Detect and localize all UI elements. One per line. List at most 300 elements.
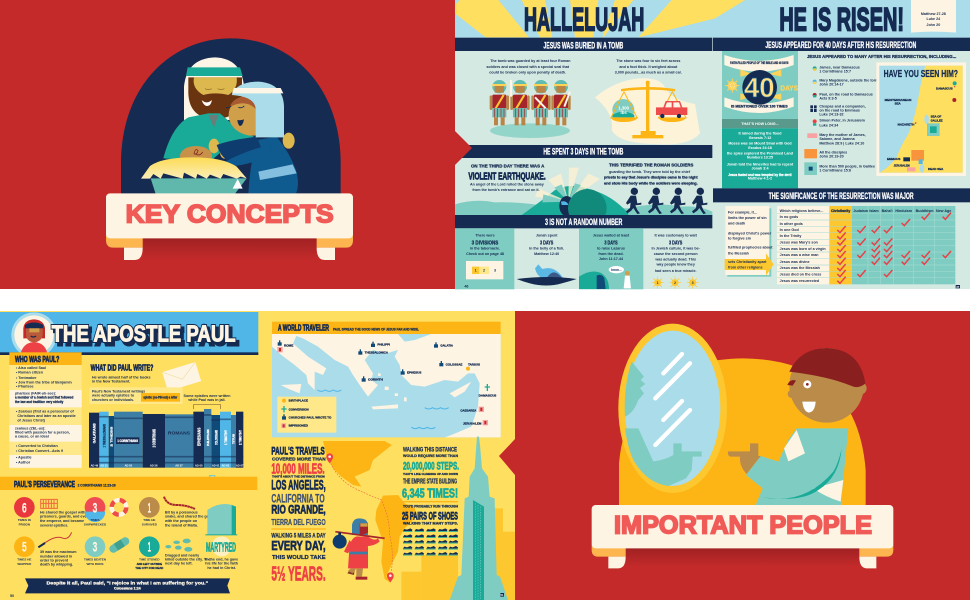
panel: Lazarus: hmm... bbox=[611, 268, 622, 272]
panel: forty days: Genesis 7:12 bbox=[749, 136, 771, 140]
text: tomb guarded bbox=[486, 59, 570, 74]
heading band: 2 CORINTHIANS 11:23-28 bbox=[78, 483, 116, 488]
stat: stoned: snake, and shared the gospel bbox=[165, 515, 216, 519]
text: violent earthquake: ON THE THIRD DAY THERE WAS A bbox=[471, 163, 545, 168]
chart: bookshelf of epistles: EPHESIANS bbox=[196, 428, 201, 446]
illustration: baby bbox=[180, 146, 212, 166]
panel: Important People bbox=[592, 324, 893, 568]
comparison table: In no gods bbox=[780, 215, 798, 219]
panel: three divisions: 3 DIVISIONS bbox=[472, 240, 499, 246]
text: walking this distance: WALKING THAT MANY STEPS. bbox=[403, 521, 458, 525]
icon: envelope bbox=[162, 362, 201, 391]
list: appearances: Mary the mother of James, bbox=[819, 133, 866, 137]
callout: epistles: were actually epistles to bbox=[91, 394, 135, 398]
panel: who was Paul: pharisee (FAIR-uh-see): bbox=[15, 392, 56, 396]
panel: Lazarus: Jesus waited at least bbox=[593, 234, 630, 238]
stat: imprisonment: the emperor, and became bbox=[40, 519, 84, 523]
text: stone weight bbox=[615, 59, 682, 74]
panel: three divisions: in the tabernacle. bbox=[470, 246, 500, 250]
panel: who was Paul: • Author bbox=[16, 461, 31, 465]
panel: customary wait: 2 bbox=[674, 281, 676, 285]
panel: who was Paul: a member of a Jewish sect that followed bbox=[15, 396, 73, 400]
stat: whippings bbox=[14, 532, 77, 566]
panel: forty days bbox=[722, 51, 798, 188]
quote banner bbox=[25, 578, 230, 593]
list: appearances: 1 Corinthians 15:7 bbox=[819, 70, 851, 74]
panel: Lazarus: 3 DAYS bbox=[604, 240, 618, 246]
stat: stoned: with the people on bbox=[164, 519, 197, 523]
chart: bookshelf of epistles: AD 63 bbox=[222, 464, 230, 468]
heading: what did Paul write: WHAT DID PAUL WRITE? bbox=[91, 363, 153, 373]
panel: who was Paul bbox=[9, 352, 82, 468]
callout: written in jail: Some epistles were written bbox=[184, 394, 230, 398]
panel: who was Paul: • Also called Saul bbox=[16, 366, 46, 370]
text: tomb guarded: soldiers and was closed with a special seal that bbox=[486, 65, 570, 69]
page number 51 bbox=[500, 593, 504, 597]
panel: who was Paul: • Roman citizen bbox=[16, 371, 43, 375]
panel: forty days: Exodus 24:18 bbox=[748, 146, 772, 150]
icon: tombstone and martyred bbox=[205, 504, 238, 570]
text: soldiers terrified: priests to say that Jesus's disciples came in the night bbox=[604, 176, 698, 180]
map: have you seen him: GALILEE bbox=[931, 118, 943, 122]
text: walking this distance: WOULD REQUIRE MORE THAN bbox=[403, 453, 458, 458]
background: top left red page bbox=[0, 0, 455, 289]
map markers: PHILIPPI bbox=[377, 343, 390, 347]
map legend: CHURCHES PAUL WROTE TO bbox=[289, 416, 332, 420]
text: Paul's travels: WALKING 5 MILES A DAY bbox=[271, 532, 326, 539]
panel: who was Paul: Christians and later as an apostle bbox=[17, 414, 76, 418]
stat: imprisonment: TIMES IN bbox=[18, 518, 31, 522]
stat: imprisonment bbox=[14, 497, 89, 527]
list: appearances: Salome, and Joanna bbox=[819, 137, 856, 141]
map of the Mediterranean bbox=[272, 334, 501, 437]
chart: bookshelf of epistles: AD 56 bbox=[150, 464, 158, 468]
panel: Jonah: Jonah spent bbox=[536, 234, 558, 238]
callout: written in jail: while Paul was in jail. bbox=[187, 398, 226, 402]
panel: Jonah bbox=[517, 234, 577, 285]
comparison table: Jesus was the Messiah bbox=[780, 266, 820, 270]
title Hallelujah: HALLELUJAH bbox=[524, 1, 644, 37]
comparison table: Judaism bbox=[853, 209, 869, 213]
panel: three divisions: Check out on page 48 bbox=[466, 252, 504, 256]
panel: forty days: Numbers 13:25 bbox=[747, 155, 773, 159]
chart: bookshelf of epistles: PHILIPPIANS bbox=[206, 429, 210, 446]
panel: who was Paul: WHO WAS PAUL? bbox=[15, 354, 59, 364]
list: appearances: Acts 9:3-5 bbox=[819, 97, 837, 101]
panel: who was Paul: zealous (ZEL-us): bbox=[15, 426, 45, 430]
stat: imprisonment: 6 bbox=[22, 499, 27, 515]
stat: shipwrecks: 3 bbox=[93, 499, 97, 515]
panel: Lazarus: John 11:17-44 bbox=[599, 257, 624, 261]
text: soldiers terrified: THIS TERRIFIED THE ROMAN SOLDIERS bbox=[609, 163, 693, 168]
list: appearances: John 20:14-17 bbox=[819, 83, 844, 87]
stat: beaten with rods: WITH RODS bbox=[86, 562, 104, 566]
quote banner: Colossians 1:24 bbox=[114, 586, 141, 590]
text: walking this distance: YOU'D PROBABLY RUN THROUGH bbox=[403, 505, 459, 509]
text: appeared to many: JESUS APPEARED TO MANY AFTER HIS RESURRECTION, INCLUDING... bbox=[807, 54, 956, 59]
list: appearances: Simon Peter, in Jerusalem bbox=[819, 119, 866, 123]
stat: stoned once: THE CITY FOR DEAD bbox=[135, 566, 163, 570]
list: appearances: Matthew 28:9 | Luke 24:10 bbox=[819, 141, 864, 145]
card: for example: and death bbox=[728, 221, 745, 225]
text: half of the books: He wrote almost half of the books bbox=[92, 376, 151, 380]
heading band bbox=[272, 322, 501, 334]
heading band: PAUL SPREAD THE GOOD NEWS OF JESUS FAR AND WIDE. bbox=[333, 328, 419, 332]
list: appearances: Paul, on the road to Damascus bbox=[819, 92, 873, 96]
chart: bookshelf of epistles: 1 THESSALONIANS bbox=[103, 424, 107, 447]
map: have you seen him: NAZARETH bbox=[898, 123, 914, 127]
panel: who was Paul: the law and tradition very strictly bbox=[15, 400, 64, 404]
panel: three divisions: 2 bbox=[483, 269, 485, 273]
chart: bookshelf of epistles: AD 61 bbox=[212, 464, 220, 468]
map pins bbox=[326, 453, 394, 582]
panel: customary wait: 1 bbox=[657, 281, 659, 285]
section heading band bbox=[455, 215, 712, 228]
panel: Lazarus bbox=[579, 228, 643, 289]
panel: forty days: Moses was on Mount Sinai with God bbox=[728, 142, 792, 146]
text: walking this distance: WALKING THIS DISTANCE bbox=[403, 447, 457, 454]
skyline buildings bbox=[401, 508, 515, 600]
illustration: Mary bbox=[209, 82, 298, 193]
text: Paul's travels: THIS WOULD TAKE bbox=[272, 555, 326, 561]
comparison table bbox=[777, 206, 955, 284]
section heading band bbox=[455, 38, 712, 51]
chart: bookshelf of epistles: AD 55 bbox=[125, 464, 133, 468]
map: have you seen him: SEA OF bbox=[931, 114, 942, 118]
stat: imprisonment: prisoners, guards, and even bbox=[40, 515, 89, 519]
banner folds bbox=[106, 235, 353, 260]
chart: 25 pairs of shoes bbox=[403, 528, 458, 555]
panel: customary wait: It was customary to wait bbox=[655, 234, 698, 238]
chart: bookshelf of epistles: 2 TIMOTHY bbox=[238, 429, 242, 445]
map legend bbox=[277, 397, 336, 433]
scripture note: Luke 24 bbox=[927, 17, 941, 21]
map markers bbox=[277, 340, 496, 426]
section heading band bbox=[713, 38, 970, 51]
stat: whippings: order to prevent bbox=[40, 558, 69, 562]
stat: stoned once bbox=[135, 536, 210, 570]
stat: shipwrecks bbox=[84, 497, 126, 527]
banner folds bbox=[592, 545, 893, 568]
stat: beaten with rods: TIMES BEATEN bbox=[84, 557, 106, 561]
chart: bookshelf of epistles: TITUS bbox=[232, 434, 236, 444]
comparison table: Buddhism bbox=[916, 209, 934, 213]
map of the Americas bbox=[323, 441, 416, 583]
banner title: KEY CONCEPTS bbox=[126, 201, 334, 229]
chart: bookshelf of epistles: AD 51 bbox=[100, 464, 108, 468]
panel: who was Paul: • Tentmaker bbox=[16, 376, 37, 380]
stat: stoned once: Dragged and nearly bbox=[165, 553, 200, 557]
panel: customary wait: In Jewish culture, it was be- bbox=[651, 246, 701, 250]
text: stone weight: 3,000 pounds...as much as a small car. bbox=[615, 70, 682, 74]
panel: forty days: IS MENTIONED OVER 100 TIMES bbox=[731, 104, 788, 108]
card: for example: For example, it... bbox=[728, 210, 757, 214]
panel: who was Paul: • Pharisee bbox=[16, 385, 34, 389]
heading band: PAUL'S PERSEVERANCE bbox=[14, 479, 75, 489]
callout: epistles: Paul's New Testament writings bbox=[92, 389, 145, 393]
panel: Jonah: Matthew 12:40 bbox=[534, 252, 559, 256]
panel: customary wait: 3 bbox=[692, 281, 694, 285]
comparison table: In other gods bbox=[780, 222, 803, 226]
comparison table: Jesus was Mary's son bbox=[780, 241, 818, 245]
map markers: EPHESUS bbox=[407, 371, 421, 375]
panel: Paul's perseverance: MARTYRED bbox=[206, 541, 236, 555]
map markers: ROME bbox=[284, 343, 293, 347]
page number 47: 47 bbox=[956, 285, 960, 289]
scripture note: Matthew 27-28 bbox=[921, 12, 946, 16]
chart: bookshelf of epistles: 2 CORINTHIANS bbox=[152, 429, 157, 447]
panel: A world traveler bbox=[272, 322, 501, 437]
map markers: THESSALONICA bbox=[365, 351, 389, 355]
list: appearances: John 20:19-20 bbox=[819, 155, 844, 159]
title: THE APOSTLE PAUL bbox=[52, 320, 236, 346]
text: Paul's travels: RIO GRANDE, bbox=[271, 502, 326, 516]
panel: forty days: Matthew 4:1-2 bbox=[748, 177, 772, 181]
illustration: soldiers bbox=[490, 80, 571, 138]
map markers: CORINTH bbox=[368, 378, 383, 382]
panel: who was Paul: • Jew from the tribe of Benjamin bbox=[16, 381, 72, 385]
comparison table: In the Trinity bbox=[780, 234, 802, 238]
map markers: COLOSSAE bbox=[446, 363, 462, 367]
list: appearances bbox=[804, 66, 880, 175]
text: Paul's travels: EVERY DAY, bbox=[271, 539, 326, 553]
chart: bookshelf of epistles: AD bbox=[210, 475, 214, 479]
card: for example: to forgive sin bbox=[728, 236, 751, 240]
stat: stoned once: 1 bbox=[148, 539, 151, 555]
stat: stoned: Bit by a poisonous bbox=[165, 511, 198, 515]
illustration: Empire State Building bbox=[450, 437, 508, 600]
comparison table: Jesus was resurrected bbox=[780, 279, 819, 283]
page number 50: 50 bbox=[10, 594, 14, 598]
map legend: IMPRISONED bbox=[289, 424, 309, 428]
stat: stoned bbox=[139, 497, 216, 527]
chart: bookshelf of epistles: AD 60 bbox=[195, 464, 203, 468]
route: Los Angeles to Tierra del Fuego bbox=[331, 463, 392, 577]
banner bbox=[106, 193, 353, 238]
section heading band: 3 IS NOT A RANDOM NUMBER bbox=[545, 217, 623, 227]
panel: forty days: Jonah 3:4 bbox=[751, 167, 769, 171]
stat: whippings: 5 bbox=[22, 539, 27, 555]
callout: epistles: churches or individuals. bbox=[92, 398, 134, 402]
stat: shipwrecks: SHIPWRECKED bbox=[84, 523, 107, 527]
list: appearances: Luke 24:34 bbox=[819, 124, 839, 128]
stat: stoned: the island of Malta. bbox=[165, 523, 198, 527]
panel: customary wait: had seen a true miracle. bbox=[655, 269, 697, 273]
orange arch bbox=[619, 358, 866, 507]
stat: stoned: TIME HE bbox=[143, 518, 155, 522]
title: THE APOSTLE PAUL bbox=[52, 320, 236, 346]
stat: stoned: SURVIVED bbox=[142, 523, 158, 527]
text: walking this distance: 20,000,000 STEPS. bbox=[403, 460, 459, 472]
panel: customary wait: way people knew they bbox=[655, 263, 696, 267]
banner bbox=[592, 505, 893, 548]
map: have you seen him: JERUSALEM bbox=[894, 163, 910, 167]
panel: customary wait: 3 DAYS bbox=[669, 240, 682, 246]
stat: stoned: 1 bbox=[148, 499, 151, 515]
panel: customary wait bbox=[651, 234, 701, 289]
panel: Lazarus: from the dead. bbox=[598, 252, 624, 256]
comparison table: Jesus died on the cross bbox=[780, 272, 821, 276]
navy arch bbox=[121, 38, 341, 195]
stat: beaten with rods bbox=[84, 536, 131, 566]
card: for example bbox=[725, 206, 774, 277]
comparison table: Jesus was born of a virgin bbox=[780, 247, 826, 251]
panel: forty days: FAITH-FILLED PEOPLE OF THE BIBLE AND 40 DAYS bbox=[730, 61, 789, 65]
stat: whippings: WHIPPED bbox=[17, 562, 32, 566]
chart: bookshelf of epistles: GALATIANS bbox=[92, 423, 96, 443]
comparison table: Hinduism bbox=[895, 209, 913, 213]
chart: bookshelf of epistles: 1 TIMOTHY bbox=[224, 430, 228, 445]
stat: stoned once: AND LEFT OUTSIDE bbox=[137, 562, 162, 566]
list: appearances: More than 500 people, in Galilee bbox=[819, 165, 875, 169]
stat: whippings: TIMES HE bbox=[17, 557, 31, 561]
text: violent earthquake: from the tomb's entrance and sat on it. bbox=[472, 188, 540, 192]
list: appearances: on the road to Emmaus bbox=[819, 109, 860, 113]
callout: epistles: epistle: (ee-PIH-sul) a letter bbox=[143, 395, 178, 399]
comparison table: New Age bbox=[936, 209, 951, 213]
scripture note: John 20 bbox=[926, 23, 940, 27]
panel: three divisions: There were bbox=[475, 234, 495, 238]
illustration: scales bbox=[595, 78, 700, 144]
card: for example: fulfilled prophecies about bbox=[728, 246, 773, 250]
stat: stoned once: next day he left. bbox=[165, 561, 193, 565]
panel: who was Paul: • Converted to Christian bbox=[16, 444, 58, 448]
stat: whippings: 39 was the maximum bbox=[40, 550, 77, 554]
map markers: JERUSALEM bbox=[463, 422, 482, 426]
white gap between spreads bbox=[0, 289, 970, 311]
panel: forty days: DAYS bbox=[780, 84, 798, 93]
section heading band: HE SPENT 3 DAYS IN THE TOMB bbox=[543, 146, 624, 156]
chart: bookshelf of epistles: AD 57 bbox=[175, 464, 183, 468]
stat: whippings: number allowed in bbox=[40, 554, 72, 558]
comparison table: Islam bbox=[869, 209, 879, 213]
panel: right page 47 bbox=[713, 0, 970, 188]
card: for example: limits the power of sin bbox=[728, 216, 767, 220]
list: appearances: Luke 24:13-32 bbox=[819, 113, 844, 117]
panel: who was Paul: filled with passion for a person, bbox=[15, 431, 70, 435]
stat: shipwrecks: TIMES bbox=[90, 518, 100, 522]
text: violent earthquake: VIOLENT EARTHQUAKE. bbox=[468, 171, 546, 182]
stat: beaten with rods: 3 bbox=[93, 539, 97, 555]
callout: epistles bbox=[89, 387, 183, 404]
portrait of Paul bbox=[11, 312, 57, 358]
map: have you seen him bbox=[876, 62, 966, 176]
panel: Lazarus: to raise Lazarus bbox=[597, 246, 625, 250]
text: walking this distance bbox=[402, 447, 459, 525]
text: Paul's travels: 10,000 MILES. bbox=[271, 462, 325, 478]
panel: forty days: It rained during the flood bbox=[738, 132, 782, 136]
icon: tombstone and martyred: he had in Christ. bbox=[207, 566, 236, 570]
text: half of the books bbox=[92, 376, 151, 384]
map: have you seen him: EMMAUS bbox=[887, 157, 900, 161]
chart: bookshelf of epistles bbox=[89, 409, 244, 479]
text: Paul's travels: COVERED MORE THAN bbox=[272, 457, 326, 462]
stat: imprisonment: several epistles. bbox=[40, 523, 68, 527]
comparison table: Jesus was divine bbox=[780, 260, 810, 264]
section heading band bbox=[455, 145, 712, 158]
panel: who was Paul: • Christian Convert...Acts 9 bbox=[16, 449, 63, 453]
header band bbox=[0, 312, 258, 355]
panel: forty days: 40 bbox=[744, 72, 775, 103]
heading band: A WORLD TRAVELER bbox=[278, 324, 329, 333]
stat: stoned once: killed outside the city. The bbox=[165, 557, 210, 561]
chart: bookshelf of epistles: COLOSSIANS bbox=[214, 430, 218, 445]
map markers: TARSUS bbox=[468, 363, 480, 367]
panel: forty days: Jonah told the Ninevites had to repent bbox=[727, 162, 794, 166]
illustration: mirror bbox=[618, 324, 727, 493]
panel: customary wait: cause the second person bbox=[654, 252, 698, 256]
banner shadow bbox=[143, 235, 317, 260]
chart: bookshelf of epistles: AD 49 bbox=[91, 464, 99, 468]
text: tomb guarded: could be broken only upon penalty of death. bbox=[489, 70, 566, 74]
panel: Paul's perseverance bbox=[0, 477, 257, 598]
card: for example: sets Christianity apart bbox=[728, 260, 767, 264]
stat: whippings: death by whipping. bbox=[40, 562, 73, 566]
background: bottom right red page bbox=[515, 311, 970, 600]
chart: bookshelf of epistles: 2 THESS bbox=[110, 427, 114, 447]
map: have you seen him: DEAD SEA bbox=[928, 167, 944, 171]
panel: Key Concepts bbox=[106, 38, 353, 260]
text: soldiers terrified: and stole His body while the soldiers were sleeping. bbox=[604, 181, 698, 185]
map markers: CAESAREA bbox=[460, 409, 477, 413]
red tab on right page edge bbox=[499, 439, 515, 475]
panel: who was Paul: a cause, or an ideal bbox=[15, 435, 49, 439]
panel: forty days: Jesus fasted and was tempted by the devil bbox=[728, 173, 792, 177]
page number 51: 51 bbox=[501, 593, 504, 597]
callout: written in jail bbox=[184, 394, 230, 409]
text: Paul's travels: LOS ANGELES, bbox=[271, 476, 326, 492]
panel: three divisions: 3 bbox=[494, 269, 496, 273]
panel: customary wait: was actually dead. This bbox=[654, 257, 696, 261]
map legend: BIRTHPLACE bbox=[289, 399, 308, 403]
comparison table: In one God bbox=[780, 228, 799, 232]
map markers: GALATIA bbox=[440, 344, 454, 348]
scripture note bbox=[911, 0, 956, 33]
panel: forty days: THAT'S HOW LONG... bbox=[741, 122, 779, 126]
background: top right spread bbox=[455, 0, 970, 289]
text: Paul's travels: THAT'S ABOUT THE DISTANCE FROM bbox=[272, 474, 326, 478]
list: appearances: All the disciples bbox=[819, 151, 847, 155]
chart: bookshelf of epistles: AD 67 bbox=[236, 464, 244, 468]
panel: forty days: the spies explored the Promised Land bbox=[727, 151, 793, 155]
panel: who was Paul: • Apostle bbox=[16, 456, 32, 460]
text: half of the books: in the New Testament. bbox=[92, 380, 130, 384]
text: violent earthquake bbox=[468, 163, 546, 192]
quote banner: Despite it all, Paul said, "I rejoice in what I am suffering for you." bbox=[46, 581, 209, 587]
header sky with rays bbox=[455, 0, 970, 38]
list: appearances: Mary Magdalene, outside the tomb bbox=[819, 79, 880, 83]
section heading band bbox=[713, 188, 970, 202]
panel: three divisions: 46 bbox=[464, 285, 468, 289]
chart: bookshelf of epistles: 1 CORINTHIANS bbox=[117, 439, 139, 443]
stat: imprisonment: He shared the gospel with bbox=[40, 511, 85, 515]
panel: who was Paul: of Jesus Christ) bbox=[17, 418, 46, 422]
text: stone weight: The stone was four to six feet across bbox=[616, 59, 680, 63]
panel: who was Paul: • Zealous (first as a persecutor of bbox=[16, 410, 75, 414]
panel: travels: 5½ YEARS. bbox=[271, 563, 326, 586]
illustration: fleeing soldiers bbox=[626, 188, 707, 214]
comparison table: Which religions believe... bbox=[780, 209, 823, 213]
text: Paul's travels bbox=[271, 445, 326, 586]
text: walking this distance: THAT'S LIKE CLIMBING UP AND DOWN bbox=[403, 472, 458, 476]
card: for example: displayed Christ's power bbox=[728, 231, 772, 235]
text: tomb guarded: The tomb was guarded by at least four Roman bbox=[490, 59, 570, 63]
illustration: Joseph bbox=[163, 57, 255, 162]
panel: travels bbox=[271, 437, 515, 600]
panel: Jonah: 3 DAYS bbox=[540, 240, 553, 246]
text: Paul's travels: PAUL'S TRAVELS bbox=[271, 445, 325, 457]
text: walking this distance: 25 PAIRS OF SHOES bbox=[402, 510, 458, 522]
